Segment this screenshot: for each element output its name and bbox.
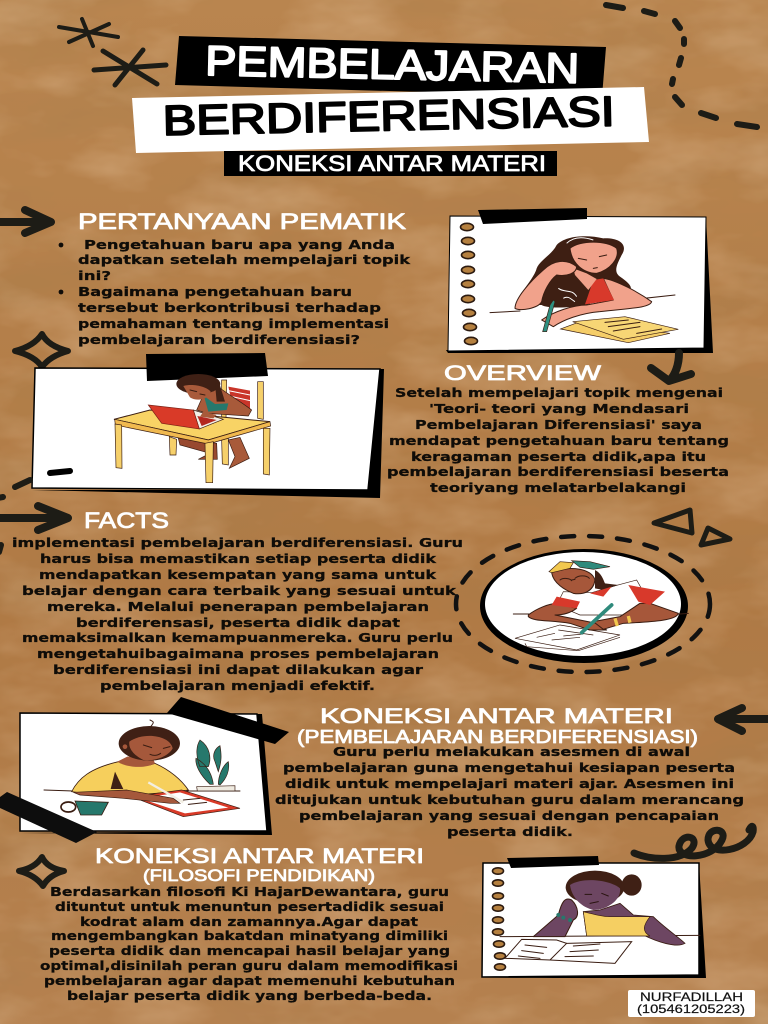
illustration: student with tablet xyxy=(44,720,240,817)
text block: koneksi filosofi: kodrat alam dan zamannya.Agar dapat xyxy=(80,915,418,929)
marks on photo xyxy=(50,471,70,473)
title banner: Pembelajaran: PEMBELAJARAN xyxy=(205,37,580,92)
text block: overview: teoriyang melatarbelakangi xyxy=(430,481,686,495)
dashed ring xyxy=(456,536,710,672)
text block: facts: memaksimalkan kemampuanmereka. Guru perlu xyxy=(22,631,453,645)
tape: bottom left of photo xyxy=(0,792,97,843)
text block: overview: pembelajaran berdiferensiasi beserta xyxy=(387,465,729,479)
text block: overview: mendapat pengetahuan baru tentang xyxy=(389,434,729,448)
text block: koneksi pembelajaran: ditujukan untuk kebutuhan guru dalam merancang xyxy=(275,793,744,807)
arrow: overview xyxy=(651,353,691,381)
name tag xyxy=(628,990,755,1017)
text block: facts: berdiferensiasi ini dapat dilakukan agar xyxy=(53,663,423,677)
text block: pertanyaan pematik xyxy=(59,238,411,347)
text block: koneksi pembelajaran: didik untuk mempelajari materi ajar. Asesmen ini xyxy=(285,777,734,791)
heading: koneksi antar materi, filosofi: KONEKSI ANTAR MATERI xyxy=(95,845,424,868)
panel: notebook photo, student reading xyxy=(482,856,706,978)
text block: koneksi filosofi: mengembangkan bakatdan minatyang dimiliki xyxy=(51,929,448,943)
tape xyxy=(478,208,587,224)
name tag: NURFADILLAH xyxy=(640,990,743,1004)
text block: facts: implementasi pembelajaran berdiferensiasi. Guru xyxy=(12,536,463,550)
heading: overview: OVERVIEW xyxy=(444,362,601,385)
heading: facts: FACTS xyxy=(84,508,169,533)
text block: pertanyaan pematik: pembelajaran berdiferensiasi? xyxy=(78,333,360,347)
heading: koneksi antar materi, pembelajaran: KONEKSI ANTAR MATERI xyxy=(320,705,673,728)
heading: koneksi antar materi, pembelajaran: (PEMBELAJARAN BERDIFERENSIASI) xyxy=(297,727,698,747)
arrow: pertanyaan pematik xyxy=(0,210,51,233)
title banner: Berdiferensiasi: BERDIFERENSIASI xyxy=(162,88,615,144)
text block: koneksi pembelajaran: pembelajaran yang sesuai dengan pencapaian xyxy=(299,809,719,823)
heading: koneksi antar materi, filosofi xyxy=(95,845,424,885)
text block: koneksi filosofi: optimal,disinilah peran guru dalam memodifikasi xyxy=(40,959,458,973)
name tag: (105461205223) xyxy=(637,1002,745,1016)
heading: pertanyaan pematik: PERTANYAAN PEMATIK xyxy=(78,209,406,234)
text block: facts: mereka. Melalui penerapan pembelajaran xyxy=(47,600,429,614)
illustration: girl at table with laptop xyxy=(114,374,271,483)
tape xyxy=(507,856,599,868)
text block: koneksi pembelajaran xyxy=(275,745,744,839)
heading: koneksi antar materi, filosofi: (FILOSOFI PENDIDIKAN) xyxy=(143,866,375,885)
text block: pertanyaan pematik: tersebut berkontribusi terhadap xyxy=(78,301,382,315)
panel: notebook photo, girl thinking xyxy=(446,208,713,353)
text block: facts: pembelajaran menjadi efektif. xyxy=(100,679,375,693)
text block: koneksi filosofi xyxy=(40,885,458,1003)
decoration: dashed trail xyxy=(0,480,30,552)
text block: facts: berdiferensasi, peserta didik dapat xyxy=(76,616,400,630)
text block: koneksi pembelajaran: pembelajaran guna mengetahui kesiapan peserta xyxy=(283,761,735,775)
text block: koneksi filosofi: peserta didik dan mencapai hasil belajar yang xyxy=(49,944,450,958)
arrow: facts xyxy=(0,506,68,530)
text block: overview: Setelah mempelajari topik mengenai xyxy=(395,386,723,400)
spiral holes xyxy=(492,868,506,970)
icon: triangles xyxy=(654,510,730,545)
tape: top right of photo xyxy=(167,697,289,744)
icon: four point star xyxy=(15,334,68,367)
text block: koneksi filosofi: pembelajaran agar dapat memenuhi kebutuhan xyxy=(44,974,455,988)
text block: koneksi pembelajaran: peserta didik. xyxy=(447,825,573,839)
decoration: asterisks xyxy=(59,19,166,85)
text block: overview xyxy=(387,386,729,495)
decoration: squiggle xyxy=(634,826,753,858)
illustration: student reading xyxy=(500,871,700,963)
decoration: dashed arc top right xyxy=(606,5,757,127)
text block: pertanyaan pematik: Pengetahuan baru apa yang Anda xyxy=(84,238,395,252)
title banner: Berdiferensiasi xyxy=(132,87,649,153)
text block: pertanyaan pematik: dapatkan setelah mempelajari topik xyxy=(78,253,411,267)
text block: pertanyaan pematik: pemahaman tentang implementasi xyxy=(78,317,389,331)
text block: facts xyxy=(12,536,463,693)
title banner: Pembelajaran xyxy=(175,36,606,97)
text block: overview: Pembelajaran Diferensiasi' saya xyxy=(415,418,702,432)
text block: koneksi filosofi: belajar peserta didik yang berbeda-beda. xyxy=(67,989,432,1003)
spiral holes xyxy=(460,223,478,345)
subtitle banner: KONEKSI ANTAR MATERI xyxy=(238,151,546,176)
text block: facts: harus bisa memastikan setiap peserta didik xyxy=(40,552,437,566)
text block: facts: belajar dengan cara terbaik yang sesuai untuk xyxy=(22,584,457,598)
illustration: girl thinking xyxy=(490,236,678,343)
text block: facts: mendapatkan kesempatan yang sama untuk xyxy=(39,568,437,582)
illustration: student writing xyxy=(513,561,688,651)
icon: four point star xyxy=(19,857,64,886)
tape xyxy=(146,353,268,381)
title block xyxy=(132,36,649,176)
panel: photo, student with tablet xyxy=(20,713,272,835)
text block: koneksi pembelajaran: Guru perlu melakukan asesmen di awal xyxy=(333,745,690,759)
panel: circular photo, student writing xyxy=(456,536,710,672)
panel: photo, girl with laptop xyxy=(32,353,384,498)
text block: koneksi filosofi: Berdasarkan filosofi Ki HajarDewantara, guru xyxy=(50,885,449,899)
text block: pertanyaan pematik: Bagaimana pengetahuan baru xyxy=(78,285,352,299)
text block: koneksi filosofi: dituntut untuk menuntun pesertadidik sesuai xyxy=(55,900,444,914)
text block: overview: 'Teori- teori yang Mendasari xyxy=(429,402,689,416)
heading: koneksi antar materi, pembelajaran xyxy=(297,705,698,747)
arrow: left pointing xyxy=(718,708,768,731)
text block: overview: keragaman peserta didik,apa itu xyxy=(411,450,706,464)
text block: facts: mengetahuibagaimana proses pembelajaran xyxy=(37,647,439,661)
text block: pertanyaan pematik: ini? xyxy=(78,269,111,283)
